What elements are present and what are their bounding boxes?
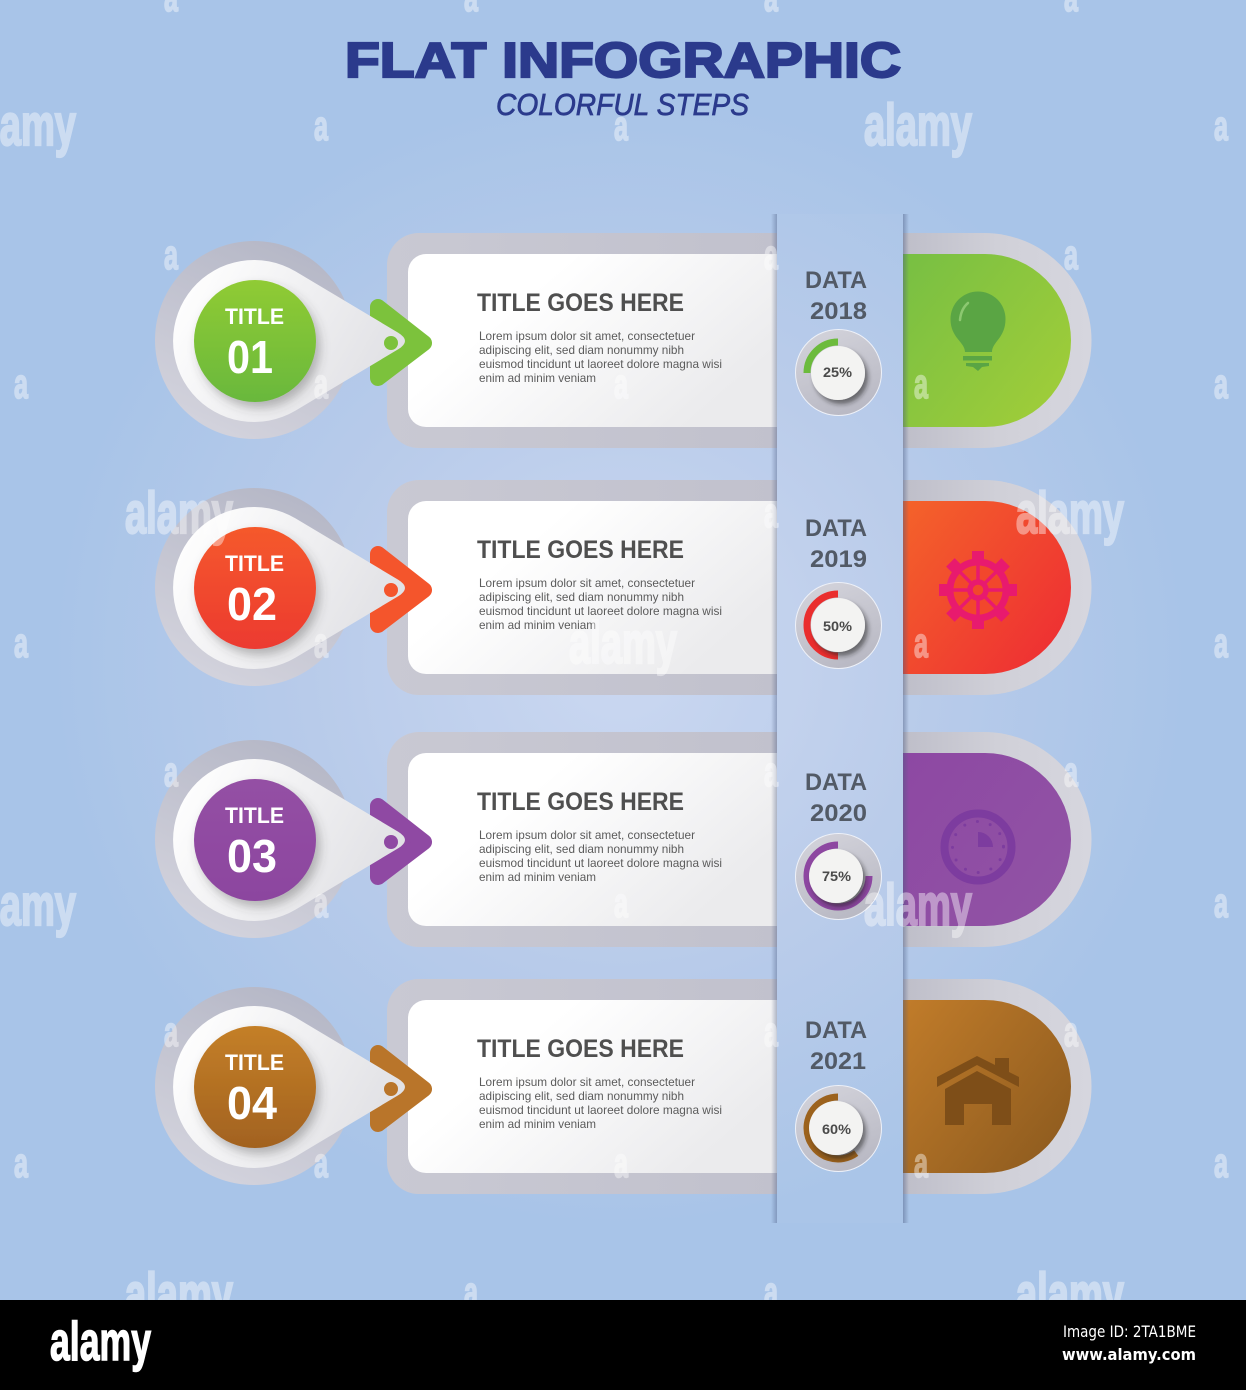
pin outer ring — [155, 740, 353, 938]
watermarks: a — [914, 360, 928, 407]
card body text: adipiscing elit, sed diam nonummy nibh — [479, 343, 684, 357]
watermarks: a — [1214, 619, 1228, 666]
chevron — [378, 1053, 424, 1124]
watermarks: alamy — [864, 873, 972, 938]
number badge: 01 — [227, 331, 273, 383]
footer logo: alamy — [50, 1310, 151, 1372]
card body text — [479, 576, 722, 632]
watermarks: a — [764, 489, 778, 536]
progress dial: 60% — [822, 1121, 852, 1137]
chevron — [378, 806, 424, 877]
icon: light bulb — [950, 291, 1006, 371]
card body text: adipiscing elit, sed diam nonummy nibh — [479, 842, 684, 856]
progress dial — [796, 330, 882, 416]
card heading: TITLE GOES HERE — [477, 788, 684, 816]
step 4 — [155, 979, 1092, 1194]
watermarks: a — [14, 619, 28, 666]
progress dial — [796, 1086, 882, 1172]
number badge: TITLE — [225, 551, 284, 576]
watermarks: a — [1214, 102, 1228, 149]
watermarks: a — [764, 1008, 778, 1055]
panel: white card — [408, 501, 777, 674]
card body text: adipiscing elit, sed diam nonummy nibh — [479, 590, 684, 604]
pin teardrop — [173, 507, 405, 669]
panel: white card — [408, 753, 777, 926]
subtitle: COLORFUL STEPS — [496, 87, 749, 122]
watermarks: a — [614, 102, 628, 149]
panel: card frame — [387, 979, 777, 1194]
watermarks: a — [314, 879, 328, 926]
card body text — [479, 828, 722, 884]
year label — [805, 267, 867, 325]
number badge: TITLE — [225, 304, 284, 329]
colored end cap — [903, 233, 1092, 448]
card body text: Lorem ipsum dolor sit amet, consectetuer — [479, 1075, 695, 1089]
card body text — [479, 329, 722, 385]
watermarks: a — [914, 619, 928, 666]
year label: 2018 — [810, 298, 867, 325]
watermarks: a — [1214, 879, 1228, 926]
pin dot — [384, 1082, 398, 1096]
pin teardrop — [173, 260, 405, 422]
icon: clock — [944, 814, 1012, 880]
card heading: TITLE GOES HERE — [477, 536, 684, 564]
watermarks: a — [614, 1139, 628, 1186]
colored end cap — [903, 732, 1092, 947]
icon: gear — [939, 551, 1017, 629]
year label: 2021 — [810, 1048, 866, 1075]
progress dial — [796, 582, 882, 668]
card body text: Lorem ipsum dolor sit amet, consectetuer — [479, 828, 695, 842]
footer url: www.alamy.com — [1062, 1345, 1196, 1364]
watermarks: a — [464, 1268, 478, 1315]
watermarks: alamy — [569, 611, 677, 676]
card body text: enim ad minim veniam — [479, 1117, 596, 1131]
timeline band — [777, 214, 903, 1223]
year label: DATA — [805, 267, 867, 294]
watermarks: alamy — [125, 1262, 233, 1327]
panel: card frame — [387, 480, 777, 695]
watermarks: a — [1064, 231, 1078, 278]
watermarks: a — [1064, 748, 1078, 795]
watermarks: a — [14, 1139, 28, 1186]
year label — [805, 515, 867, 573]
year label: DATA — [805, 769, 867, 796]
title: FLAT INFOGRAPHIC — [345, 34, 901, 88]
watermarks: a — [314, 1139, 328, 1186]
watermarks: alamy — [864, 93, 972, 158]
chevron — [378, 554, 424, 625]
year label: 2020 — [810, 800, 867, 827]
watermarks: a — [914, 1139, 928, 1186]
watermarks: a — [614, 879, 628, 926]
colored end cap — [903, 979, 1092, 1194]
panel: white card — [408, 1000, 777, 1173]
year label: DATA — [805, 1017, 867, 1044]
card body text: Lorem ipsum dolor sit amet, consectetuer — [479, 576, 695, 590]
number badge: TITLE — [225, 1050, 284, 1075]
watermarks: alamy — [1016, 1262, 1124, 1327]
progress dial: 25% — [823, 364, 853, 380]
number badge: 04 — [227, 1077, 277, 1129]
pin dot — [384, 835, 398, 849]
pin outer ring — [155, 987, 353, 1185]
icon: house — [937, 1056, 1019, 1125]
card body text: adipiscing elit, sed diam nonummy nibh — [479, 1089, 684, 1103]
band edge shadow left — [771, 214, 777, 1223]
image id: Image ID: 2TA1BME — [1063, 1322, 1196, 1341]
pin outer ring — [155, 488, 353, 686]
colored end cap — [903, 480, 1092, 695]
number badge — [194, 280, 316, 402]
watermarks: a — [1214, 360, 1228, 407]
card body text: enim ad minim veniam — [479, 618, 596, 632]
band edge shadow right — [903, 214, 909, 1223]
card heading: TITLE GOES HERE — [477, 1035, 684, 1063]
number badge — [194, 779, 316, 901]
pin teardrop — [173, 1006, 405, 1168]
watermarks: a — [164, 1008, 178, 1055]
number badge — [194, 1026, 316, 1148]
pin outer ring — [155, 241, 353, 439]
card body text: euismod tincidunt ut laoreet dolore magna wisi — [479, 357, 722, 371]
number badge: TITLE — [225, 803, 284, 828]
pin dot — [384, 336, 398, 350]
watermarks: alamy — [1016, 481, 1124, 546]
panel: card frame — [387, 732, 777, 947]
step 1 — [155, 233, 1092, 448]
card body text: enim ad minim veniam — [479, 371, 596, 385]
pin teardrop — [173, 759, 405, 921]
panel: white card — [408, 254, 777, 427]
watermarks: a — [764, 1268, 778, 1315]
watermarks: a — [164, 748, 178, 795]
number badge: 02 — [227, 578, 277, 630]
watermarks: a — [764, 748, 778, 795]
progress dial: 75% — [822, 868, 852, 884]
watermarks: a — [164, 231, 178, 278]
year label: DATA — [805, 515, 867, 542]
watermarks: a — [314, 102, 328, 149]
step 3 — [155, 732, 1092, 947]
watermarks: alamy — [125, 481, 233, 546]
card heading: TITLE GOES HERE — [477, 289, 684, 317]
watermarks: a — [764, 231, 778, 278]
watermarks: a — [14, 360, 28, 407]
card body text: euismod tincidunt ut laoreet dolore magna wisi — [479, 604, 722, 618]
progress dial: 50% — [823, 618, 853, 634]
card body text: euismod tincidunt ut laoreet dolore magna wisi — [479, 856, 722, 870]
year label — [805, 1017, 867, 1075]
watermarks: a — [1214, 1139, 1228, 1186]
panel: card frame — [387, 233, 777, 448]
card body text: euismod tincidunt ut laoreet dolore magna wisi — [479, 1103, 722, 1117]
pin dot — [384, 583, 398, 597]
step 2 — [155, 480, 1092, 695]
watermarks: a — [314, 360, 328, 407]
number badge — [194, 527, 316, 649]
year label — [805, 769, 867, 827]
number badge: 03 — [227, 830, 277, 882]
watermarks: a — [1064, 1008, 1078, 1055]
card body text: Lorem ipsum dolor sit amet, consectetuer — [479, 329, 695, 343]
progress dial — [796, 834, 882, 920]
footer bar — [0, 1300, 1246, 1390]
watermarks: a — [614, 360, 628, 407]
chevron — [378, 307, 424, 378]
watermarks: a — [314, 619, 328, 666]
year label: 2019 — [810, 546, 867, 573]
card body text — [479, 1075, 722, 1131]
card body text: enim ad minim veniam — [479, 870, 596, 884]
